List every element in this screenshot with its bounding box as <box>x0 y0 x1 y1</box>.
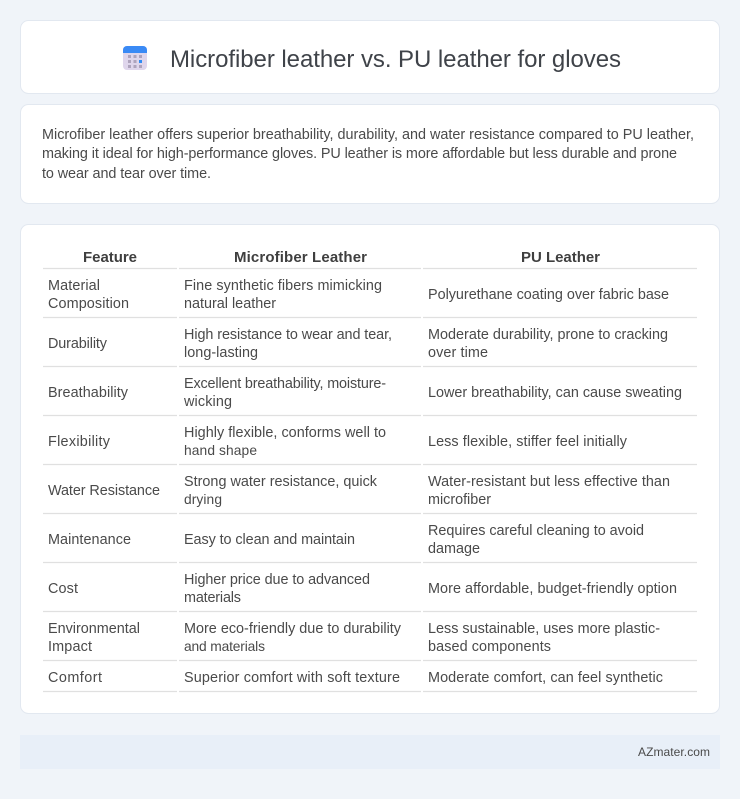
row: flexibility: Less flexible, stiffer feel initially <box>428 434 628 450</box>
row: breathability: Lower breathability, can cause sweating <box>428 385 682 401</box>
row: maintenance: Easy to clean and maintain <box>184 532 355 548</box>
row: environmental impact: Less sustainable, uses more plastic- <box>428 621 660 637</box>
row: maintenance: Maintenance <box>48 532 131 548</box>
row: environmental impact: Environmental <box>48 621 140 637</box>
row: flexibility: Highly flexible, conforms well to <box>184 425 386 441</box>
table header <box>83 249 600 266</box>
row: cost: Higher price due to advanced <box>184 572 370 588</box>
row: water resistance: Water Resistance <box>48 483 160 499</box>
footer: AZmater.com <box>638 745 710 759</box>
summary text: making it ideal for high-performance gloves. PU leather is more affordable but less durable and prone <box>42 146 677 162</box>
row: durability: long-lasting <box>184 345 258 361</box>
row: environmental impact: Impact <box>48 639 92 655</box>
row: material composition: Material <box>48 278 100 294</box>
title: Microfiber leather vs. PU leather for gloves <box>170 46 621 73</box>
panel: comparison table <box>20 224 720 714</box>
row: comfort: Moderate comfort, can feel synthetic <box>428 670 663 686</box>
row: environmental impact: based components <box>428 639 551 655</box>
row: maintenance <box>48 523 644 557</box>
row: water resistance <box>48 474 670 508</box>
row: material composition <box>48 278 669 312</box>
row: breathability: Breathability <box>48 385 129 401</box>
icon: calendar <box>123 46 147 70</box>
row: durability <box>48 327 668 361</box>
row: cost: More affordable, budget-friendly option <box>428 581 677 597</box>
row: water resistance: microfiber <box>428 492 491 508</box>
row: durability: Moderate durability, prone to cracking <box>428 327 668 343</box>
row: comfort: Superior comfort with soft texture <box>184 670 400 686</box>
row: cost: materials <box>184 590 241 606</box>
row: environmental impact: More eco-friendly due to durability <box>184 621 402 637</box>
row: material composition: Fine synthetic fibers mimicking <box>184 278 382 294</box>
row: maintenance: damage <box>428 541 480 557</box>
row: material composition: Composition <box>48 296 129 312</box>
row: maintenance: Requires careful cleaning to avoid <box>428 523 644 539</box>
table header: Feature <box>83 249 137 266</box>
row: flexibility <box>48 425 628 458</box>
row: durability: over time <box>428 345 488 361</box>
row: durability: Durability <box>48 336 108 352</box>
row: comfort <box>48 670 663 686</box>
panel: summary <box>20 104 720 204</box>
row: material composition: natural leather <box>184 296 276 312</box>
row: breathability <box>48 376 682 410</box>
panel: title card <box>20 20 720 94</box>
row: water resistance: drying <box>184 492 222 507</box>
row: water resistance: Water-resistant but less effective than <box>428 474 670 490</box>
row: breathability: wicking <box>183 394 232 410</box>
footer <box>20 735 720 769</box>
row: cost <box>48 572 677 606</box>
summary text <box>42 127 694 182</box>
row: breathability: Excellent breathability, moisture- <box>184 376 386 392</box>
row: flexibility: hand shape <box>184 443 257 458</box>
summary text: to wear and tear over time. <box>42 166 211 182</box>
table header: PU Leather <box>521 249 600 266</box>
row: material composition: Polyurethane coating over fabric base <box>428 287 669 303</box>
row: water resistance: Strong water resistance, quick <box>184 474 378 490</box>
row: environmental impact <box>48 621 660 655</box>
row: comfort: Comfort <box>48 670 102 686</box>
row: flexibility: Flexibility <box>48 434 111 450</box>
row: environmental impact: and materials <box>184 639 265 654</box>
row: cost: Cost <box>48 581 78 597</box>
table header: Microfiber Leather <box>234 249 367 266</box>
summary text: Microfiber leather offers superior breathability, durability, and water resistance compared to PU leather, <box>42 127 694 143</box>
row: durability: High resistance to wear and tear, <box>184 327 392 343</box>
